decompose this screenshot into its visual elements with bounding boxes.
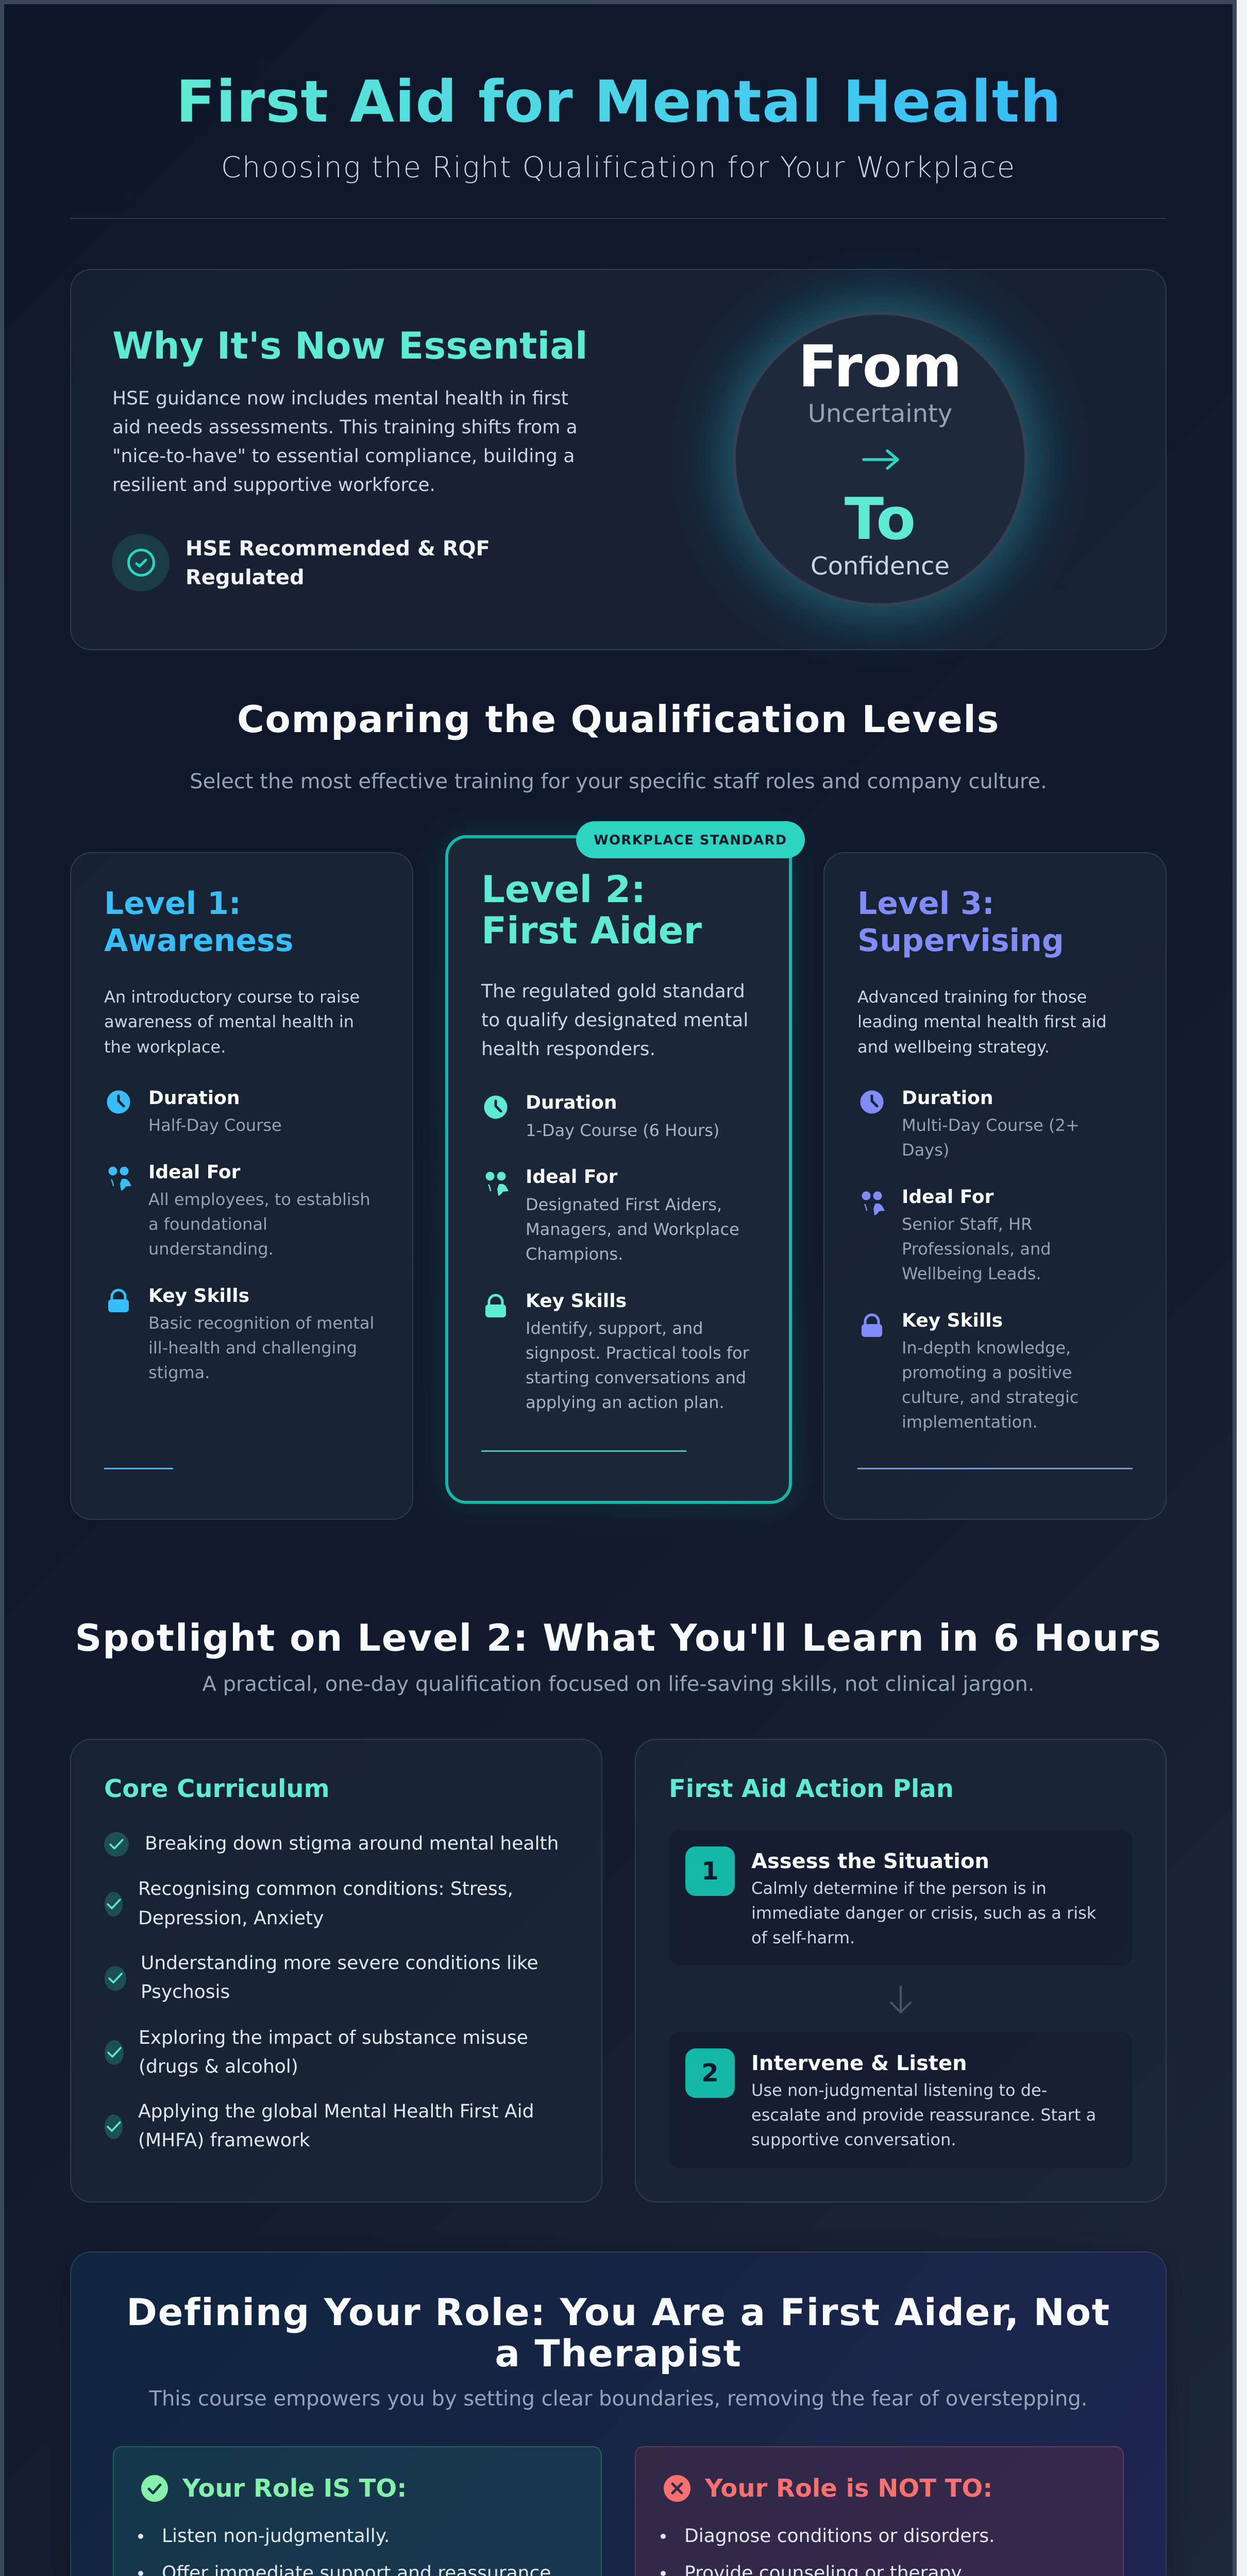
level 1 description: awareness of mental health in (104, 1012, 354, 1031)
ideal for: Wellbeing Leads. (902, 1264, 1041, 1283)
heading: comparing levels: Comparing the Qualification Levels (237, 698, 1000, 741)
from-to circle: Confidence (811, 552, 950, 581)
regulated label: HSE Recommended & RQF (186, 537, 490, 561)
step 1: of self-harm. (751, 1928, 855, 1947)
duration: Duration (526, 1092, 617, 1113)
icon: check (141, 2475, 168, 2502)
icon: people (862, 1191, 885, 1215)
item 4: (drugs & alcohol) (139, 2056, 298, 2077)
ideal for: a foundational (148, 1214, 267, 1234)
item 2: Recognising common conditions: Stress, (138, 1878, 513, 1900)
subheading: comparing levels: Select the most effective training for your specific staff roles and company culture. (190, 770, 1047, 793)
ideal for: understanding. (148, 1239, 274, 1259)
from-to circle: Uncertainty (808, 399, 952, 428)
panel: first aid action plan (635, 1739, 1166, 2202)
panel: your role is to (113, 2447, 601, 2576)
ideal for: Ideal For (526, 1166, 618, 1188)
level 1 title: Awareness (104, 923, 293, 959)
ideal for: Ideal For (148, 1162, 241, 1183)
panel: why it's now essential (71, 269, 1166, 650)
badge: workplace standard (576, 821, 805, 858)
ideal for: Champions. (526, 1244, 623, 1264)
icon: lock (108, 1290, 129, 1312)
level 3 description: and wellbeing strategy. (857, 1037, 1050, 1057)
duration: Multi-Day Course (2+ (902, 1115, 1080, 1135)
ideal for: Managers, and Workplace (526, 1219, 739, 1239)
from-to circle: From (798, 333, 962, 400)
key skills (148, 1285, 374, 1382)
duration: Half-Day Course (148, 1115, 282, 1135)
duration: Days) (902, 1140, 949, 1160)
level 2 title: Level 2: (481, 868, 646, 911)
icon: lock (485, 1295, 506, 1317)
badge: workplace standard: WORKPLACE STANDARD (594, 833, 787, 848)
text block: aid needs assessments. This training shifts from a (112, 417, 578, 438)
arrow (864, 451, 898, 468)
text block: HSE guidance now includes mental health in first (112, 388, 568, 409)
item 4 (105, 2027, 528, 2077)
ideal for: Senior Staff, HR (902, 1214, 1032, 1234)
ideal for: Professionals, and (902, 1239, 1051, 1259)
key skills: starting conversations and (526, 1368, 746, 1387)
item 3: Psychosis (141, 1981, 230, 2003)
regulated label: Regulated (186, 566, 305, 589)
item 5 (105, 2101, 534, 2151)
key skills: Basic recognition of mental (148, 1313, 374, 1333)
heading: spotlight: Spotlight on Level 2: What You'll Learn in 6 Hours (75, 1616, 1161, 1659)
action plan heading: First Aid Action Plan (669, 1774, 954, 1803)
duration (148, 1088, 282, 1135)
title: First Aid for Mental Health (176, 69, 1062, 135)
icon: check badge (112, 534, 170, 591)
item 1: Breaking down stigma around mental health (145, 1833, 559, 1854)
duration (902, 1088, 1080, 1160)
list (661, 2526, 1034, 2576)
ideal for: Designated First Aiders, (526, 1195, 722, 1214)
ideal for: Ideal For (902, 1187, 994, 1208)
level 2 description: health responders. (481, 1039, 655, 1060)
step 2 (669, 2032, 1133, 2168)
ideal for (526, 1166, 739, 1264)
icon: lock (862, 1315, 882, 1337)
key skills: Identify, support, and (526, 1318, 703, 1338)
ideal for (902, 1187, 1051, 1283)
step 1: 1 (701, 1857, 719, 1886)
step 2: 2 (701, 2059, 719, 2088)
header (70, 69, 1167, 219)
key skills: stigma. (148, 1363, 210, 1382)
level 1 title: Level 1: (104, 886, 241, 922)
level 1 description: An introductory course to raise (104, 987, 360, 1007)
duration: 1-Day Course (6 Hours) (526, 1121, 719, 1140)
icon: people (108, 1166, 131, 1191)
role heading: a Therapist (495, 2332, 742, 2375)
item 2 (105, 1878, 513, 1929)
step 2: supportive conversation. (751, 2130, 956, 2149)
duration (526, 1092, 719, 1140)
role heading: Defining Your Role: You Are a First Aider, Not (126, 2291, 1110, 2334)
level indicator bar (481, 1450, 686, 1452)
key skills: promoting a positive (902, 1363, 1072, 1382)
level 1 description: the workplace. (104, 1037, 226, 1057)
duration: Duration (148, 1088, 240, 1109)
text block: "nice-to-have" to essential compliance, building a (112, 446, 575, 467)
step 2: escalate and provide reassurance. Start a (751, 2105, 1096, 2125)
panel: level 2 (446, 821, 805, 1502)
step 1: Assess the Situation (751, 1850, 989, 1873)
key skills: ill-health and challenging (148, 1338, 357, 1358)
level 3 title: Supervising (857, 923, 1064, 959)
level indicator bar (104, 1468, 173, 1469)
panel: level 1 (71, 853, 413, 1519)
item 2: Depression, Anxiety (138, 1908, 324, 1929)
level indicator bar (857, 1468, 1133, 1469)
heading: Your Role IS TO: (182, 2474, 407, 2503)
key skills: culture, and strategic (902, 1387, 1079, 1407)
level 3 title: Level 3: (857, 886, 995, 922)
text block: resilient and supportive workforce. (112, 474, 435, 496)
key skills: Key Skills (148, 1285, 249, 1307)
from-to circle (728, 307, 1033, 612)
step 1: immediate danger or crisis, such as a risk (751, 1903, 1097, 1923)
subheading: spotlight: A practical, one-day qualification focused on life-saving skills, not clinical jargon. (202, 1672, 1035, 1696)
step 1: Calmly determine if the person is in (751, 1878, 1047, 1898)
level 2 description: to qualify designated mental (481, 1010, 748, 1031)
ideal for: All employees, to establish (148, 1190, 370, 1209)
subtitle: Choosing the Right Qualification for Your Workplace (221, 151, 1016, 184)
panel: your role is not to (635, 2447, 1123, 2576)
heading: Why It's Now Essential (112, 324, 587, 367)
item 3: Understanding more severe conditions like (141, 1953, 538, 1974)
key skills: In-depth knowledge, (902, 1338, 1071, 1358)
key skills: Key Skills (902, 1310, 1003, 1331)
duration: Duration (902, 1088, 993, 1109)
level 3 description: Advanced training for those (857, 987, 1087, 1007)
list (138, 2526, 562, 2576)
icon: clock (484, 1095, 507, 1119)
key skills: signpost. Practical tools for (526, 1343, 750, 1363)
ideal for (148, 1162, 370, 1259)
key skills: applying an action plan. (526, 1393, 724, 1412)
list: Diagnose conditions or disorders. (684, 2526, 995, 2547)
panel: defining your role (71, 2252, 1166, 2576)
level 2 title: First Aider (481, 909, 702, 952)
panel: core curriculum (71, 1739, 602, 2202)
heading: Your Role is NOT TO: (704, 2474, 992, 2503)
key skills (902, 1310, 1079, 1432)
item 4: Exploring the impact of substance misuse (139, 2027, 528, 2048)
icon: people (485, 1172, 509, 1196)
item 3 (105, 1953, 538, 2003)
icon: clock (861, 1090, 883, 1114)
item 5: Applying the global Mental Health First Aid (138, 2101, 534, 2122)
panel: level 3 (824, 853, 1166, 1519)
step 2: Use non-judgmental listening to de- (751, 2080, 1047, 2100)
step 1 (669, 1830, 1133, 1965)
key skills (526, 1291, 750, 1412)
arrow: down (891, 1987, 911, 2012)
level 2 description: The regulated gold standard (481, 981, 745, 1002)
key skills: implementation. (902, 1412, 1038, 1432)
icon: cross (664, 2475, 690, 2502)
curriculum heading: Core Curriculum (104, 1774, 330, 1803)
list: Listen non-judgmentally. (162, 2526, 390, 2547)
step 2: Intervene & Listen (751, 2052, 967, 2075)
icon: clock (107, 1090, 130, 1114)
key skills: Key Skills (526, 1291, 627, 1312)
from-to circle: To (845, 486, 916, 553)
level 3 description: leading mental health first aid (857, 1012, 1107, 1031)
item 5: (MHFA) framework (138, 2130, 310, 2151)
role subheading: This course empowers you by setting clear boundaries, removing the fear of overstepping. (149, 2387, 1087, 2411)
